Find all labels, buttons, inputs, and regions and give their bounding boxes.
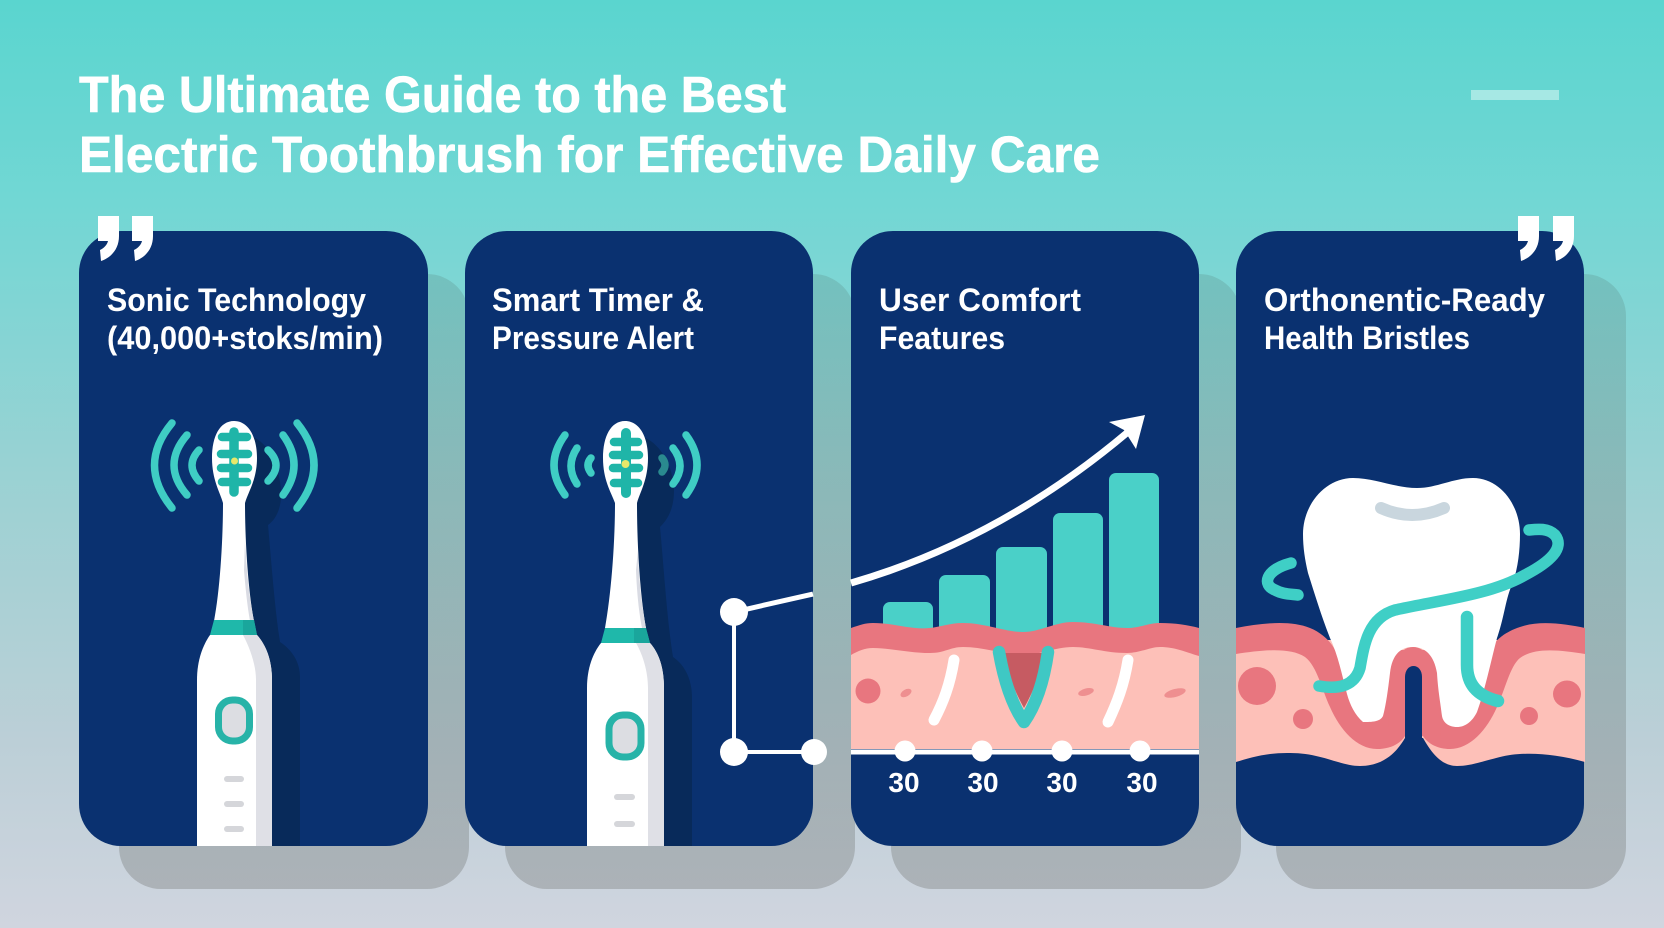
- card shadow: [505, 274, 855, 889]
- panel: sonic technology: [79, 216, 469, 889]
- connector nodes: [720, 594, 827, 766]
- title: Electric Toothbrush for Effective Daily Care: [79, 126, 1100, 183]
- heading: Sonic Technology: [107, 282, 366, 318]
- arrow: rising trend: [851, 415, 1145, 583]
- title: The Ultimate Guide to the Best: [79, 66, 786, 123]
- heading: Smart Timer &: [492, 282, 704, 318]
- card background: [465, 231, 813, 846]
- panel: health bristles: [1236, 216, 1626, 889]
- icon: tooth and gums: [1236, 478, 1585, 766]
- card shadow: [119, 274, 469, 889]
- card background: [851, 231, 1199, 846]
- decorative header bar: [1471, 90, 1559, 100]
- quote mark: [98, 216, 153, 261]
- card shadow: [1276, 274, 1626, 889]
- quote mark: [1518, 216, 1574, 261]
- panel: smart timer: [465, 231, 855, 889]
- bar chart: [883, 473, 1159, 652]
- card shadow: [891, 274, 1241, 889]
- timeline: [851, 740, 1199, 798]
- title: [79, 66, 1100, 183]
- heading: [107, 282, 383, 356]
- timeline: 30: [1046, 767, 1078, 798]
- heading: Health Bristles: [1264, 320, 1470, 356]
- heading: Pressure Alert: [492, 320, 694, 356]
- card background: [79, 231, 428, 846]
- icon: toothbrush with timer: [554, 421, 697, 846]
- icon: teal bristle wires: [1267, 529, 1558, 701]
- heading: [492, 282, 704, 356]
- heading: Features: [879, 320, 1005, 356]
- timeline: 30: [967, 767, 999, 798]
- heading: (40,000+stoks/min): [107, 320, 383, 356]
- heading: Orthonentic-Ready: [1264, 282, 1545, 318]
- timeline: 30: [888, 767, 920, 798]
- timeline: 30: [1126, 767, 1158, 798]
- panel: user comfort: [851, 231, 1241, 889]
- card background: [1236, 231, 1584, 846]
- icon: vibrating toothbrush: [154, 421, 314, 846]
- heading: User Comfort: [879, 282, 1081, 318]
- gum illustration: [851, 622, 1199, 749]
- heading: [879, 282, 1081, 356]
- heading: [1264, 282, 1545, 356]
